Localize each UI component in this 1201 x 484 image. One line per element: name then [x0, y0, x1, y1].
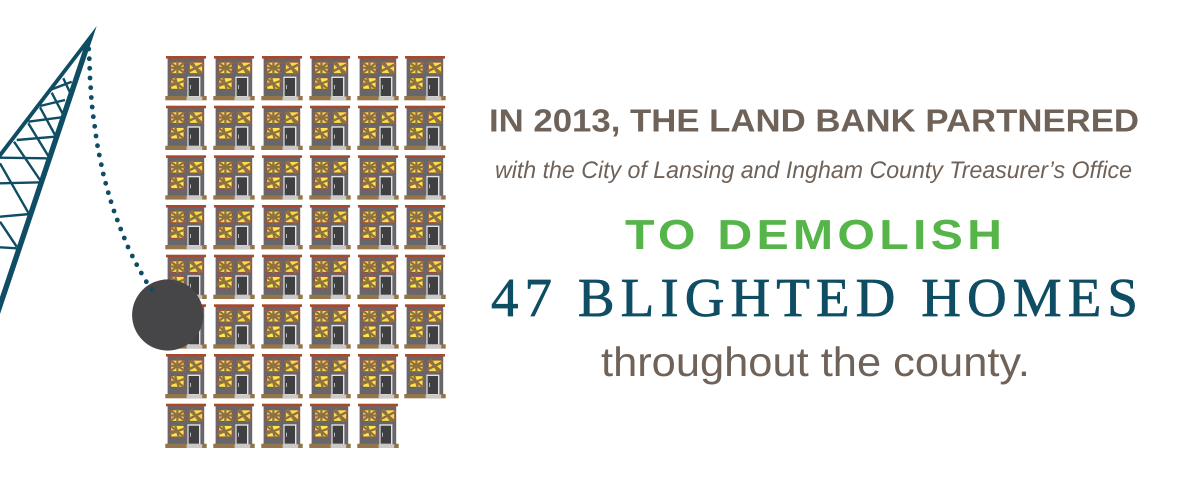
row 5: [165, 255, 446, 299]
headline text block: [489, 102, 1139, 385]
row 3: [165, 155, 446, 200]
row 8: [165, 404, 399, 448]
last chain dot on ball: [149, 287, 154, 292]
row 4: [165, 205, 446, 249]
row 6: [165, 304, 446, 349]
row 1: [165, 56, 446, 100]
line: with the city of lansing: with the City of Lansing and Ingham County Treasurer’s Office: [495, 157, 1132, 184]
row 7: [165, 354, 446, 398]
row 2: [165, 106, 446, 150]
line: throughout the county: throughout the county.: [601, 339, 1030, 385]
grid of 47 blighted houses: [165, 56, 446, 448]
dotted chain dots: [86, 47, 149, 284]
wrecking ball: [132, 279, 203, 351]
line: 47 blighted homes: 47 BLIGHTED HOMES: [491, 267, 1138, 328]
crane boom: [0, 26, 97, 314]
line: to demolish: TO DEMOLISH: [625, 211, 1002, 258]
line: in 2013 the land bank partnered: IN 2013, THE LAND BANK PARTNERED: [489, 102, 1139, 138]
